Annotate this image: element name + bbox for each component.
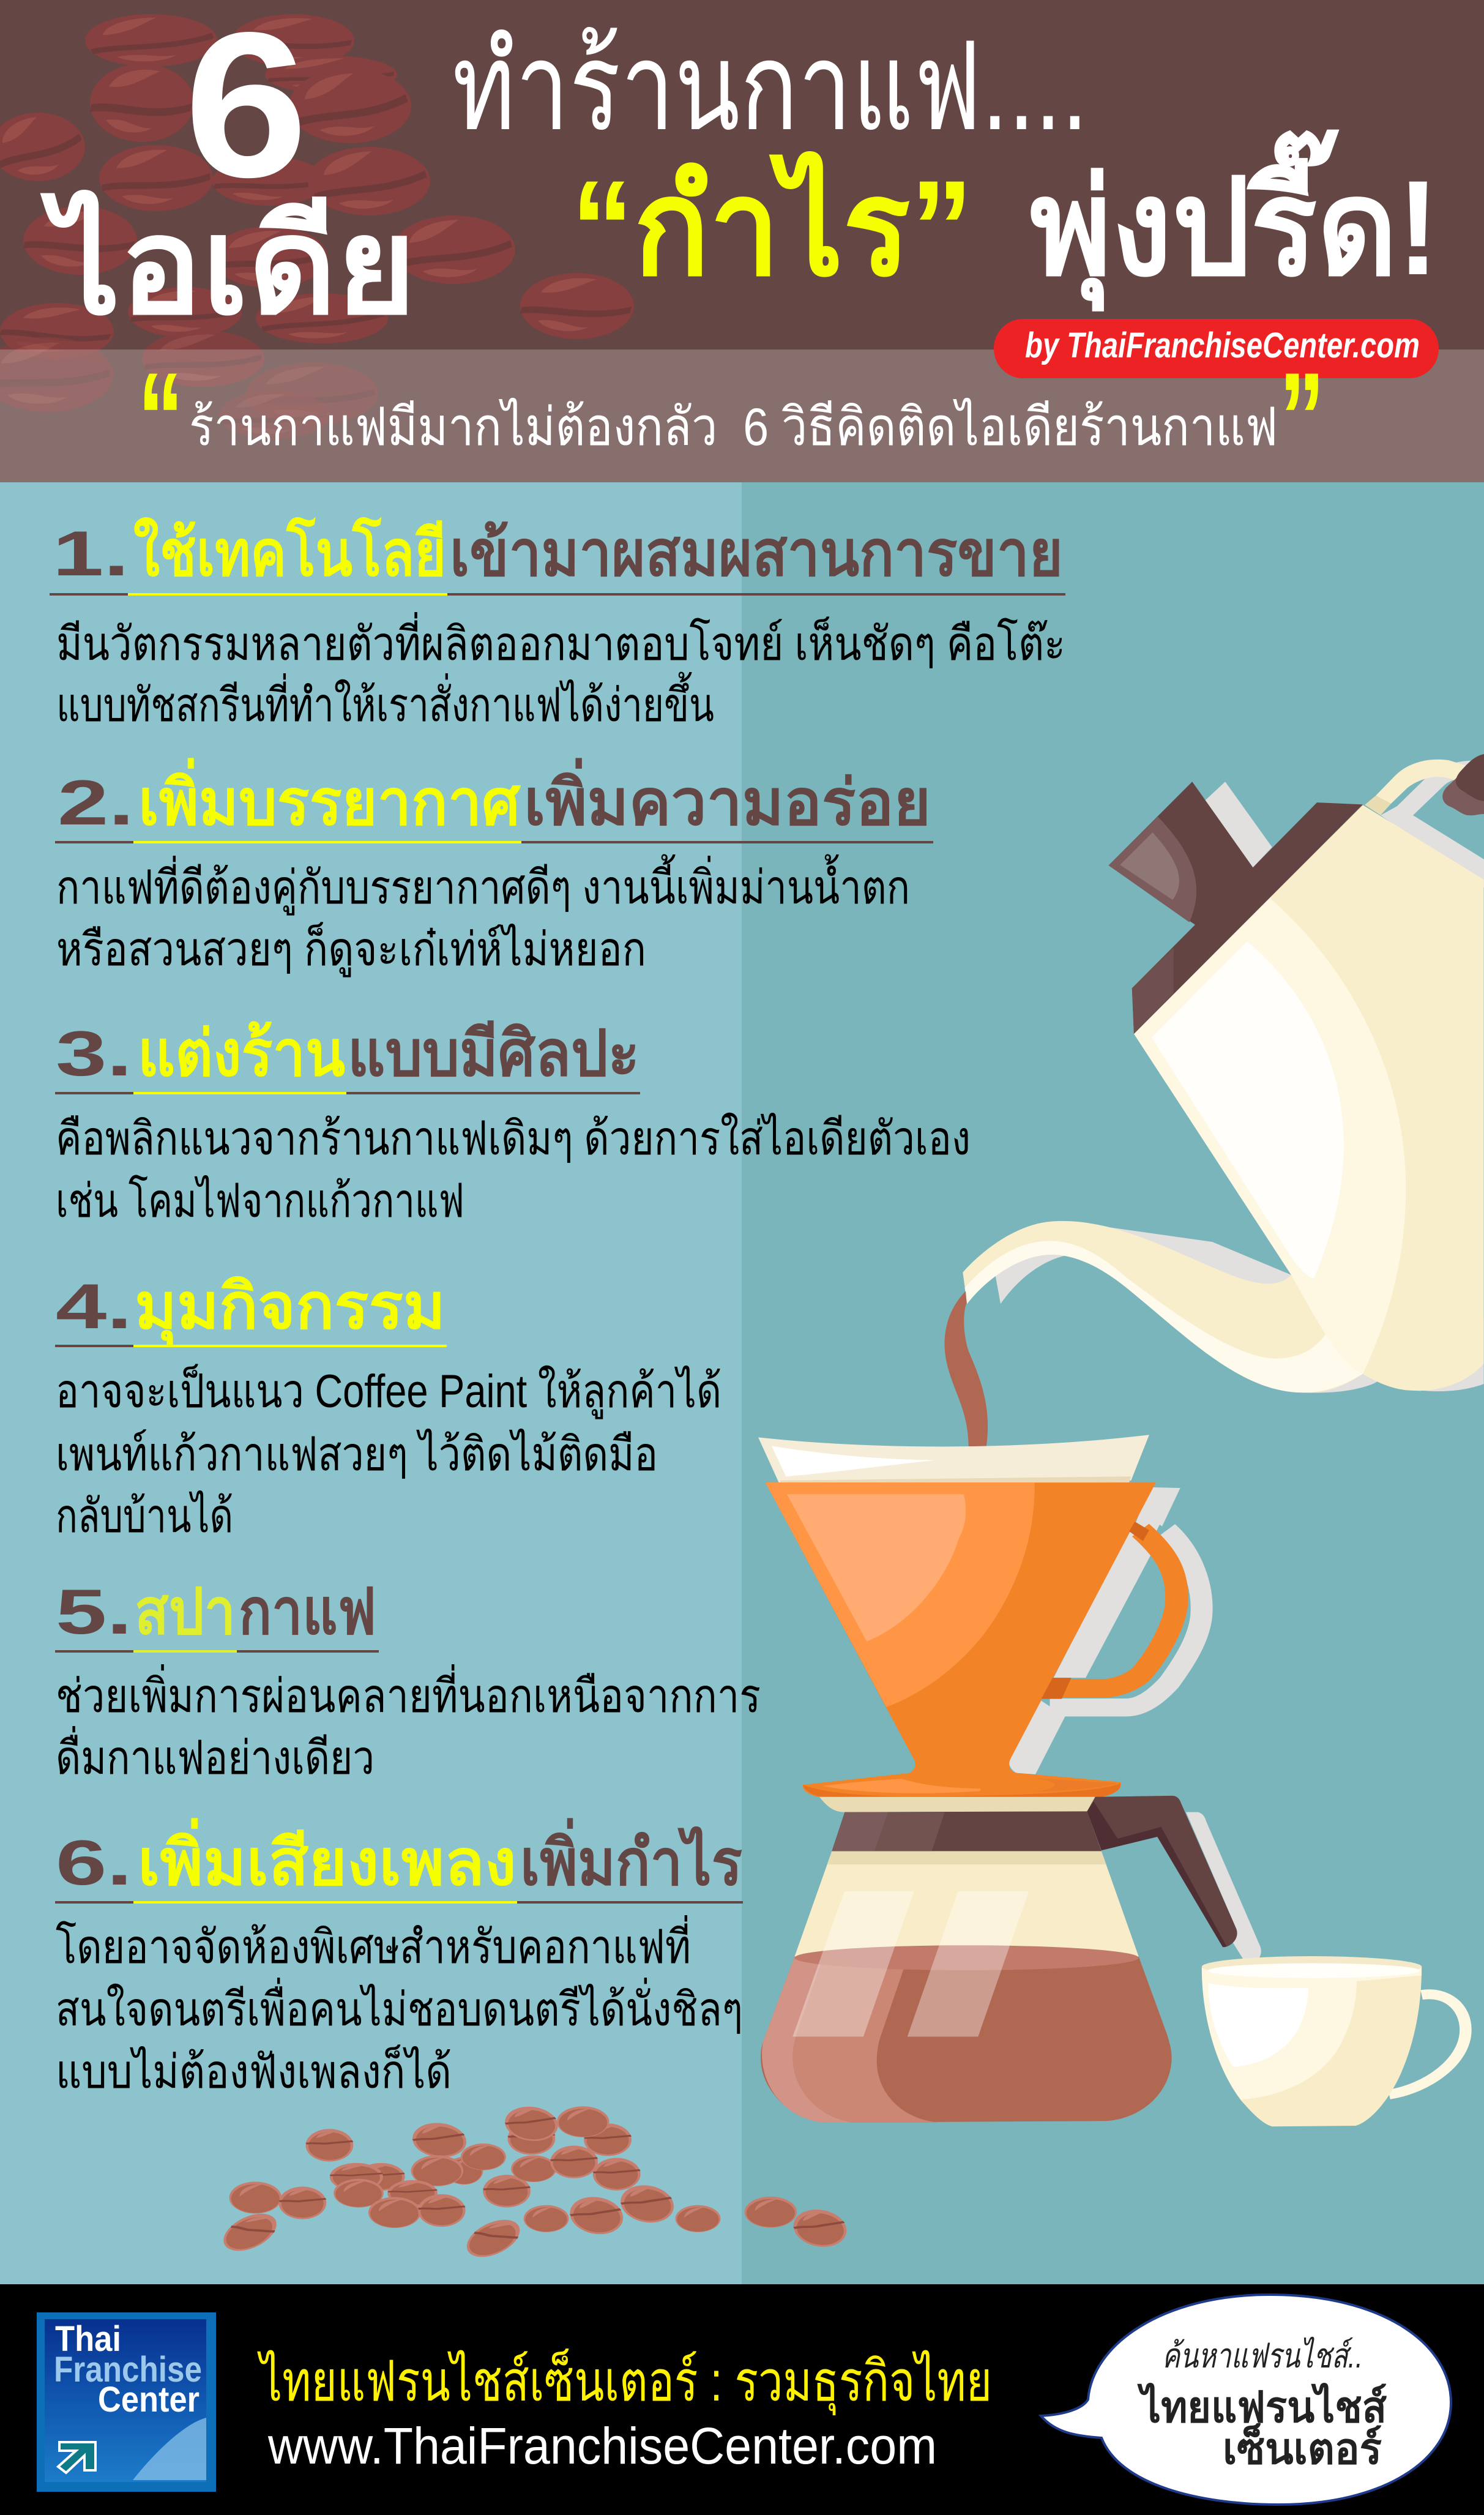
heading 3: แต่งร้าน: [138, 1018, 345, 1089]
section 2: [55, 758, 933, 977]
paper filter: [758, 1435, 1149, 1484]
heading 2: เพิ่มบรรยากาศ: [138, 758, 521, 839]
body text 4: อาจจะเป็นแนว Coffee Paint ให้ลูกค้าได้: [56, 1364, 721, 1419]
speech bubble: ไทยแฟรนไชส์: [1136, 2382, 1387, 2431]
heading 4: 4.: [56, 1271, 132, 1342]
body text 3: [56, 1112, 971, 1227]
subtitle quote: “: [138, 346, 184, 490]
orange cone: [766, 1482, 1156, 1801]
illustration: scattered coffee beans: [213, 2105, 852, 2260]
section 5: [55, 1577, 761, 1784]
heading 1: 1.: [53, 518, 129, 589]
heading 5: 5.: [56, 1577, 132, 1648]
logo: Thai Franchise Center: Franchise: [54, 2350, 202, 2390]
panel: header: [0, 0, 1484, 490]
body text 1: [56, 612, 1065, 731]
body text 1: มีนวัตกรรมหลายตัวที่ผลิตออกมาตอบโจทย์ เห็นชัดๆ คือโต๊ะ: [56, 612, 1065, 670]
heading 5: สปา: [135, 1577, 236, 1648]
title: ทำร้านกาแฟ....: ทำร้านกาแฟ....: [452, 19, 1088, 155]
body text 4: [56, 1364, 721, 1542]
heading 3: แบบมีศิลปะ: [348, 1018, 639, 1089]
badge: by ThaiFranchiseCenter.com: [994, 319, 1439, 378]
body text 1: แบบทัชสกรีนที่ทำให้เราสั่งกาแฟได้ง่ายขึ้น: [56, 671, 714, 731]
coffee cup: [1202, 1956, 1466, 2126]
body text 2: กาแฟที่ดีต้องคู่กับบรรยากาศดีๆ งานนี้เพิ่มม่านน้ำตก: [56, 854, 910, 916]
title: ไอเดีย: ไอเดีย: [40, 190, 416, 342]
subtitle quote: [138, 346, 1325, 490]
logo: Thai Franchise Center: Thai: [55, 2319, 121, 2359]
carafe glass: [761, 1796, 1261, 2123]
heading 3: 3.: [56, 1018, 132, 1089]
speech bubble: เซ็นเตอร์: [1223, 2423, 1382, 2473]
heading 6: 6.: [56, 1828, 132, 1899]
speech bubble: ค้นหาแฟรนไชส์..: [1162, 2336, 1363, 2375]
heading 4: มุมกิจกรรม: [135, 1271, 446, 1346]
body text 3: เช่น โคมไฟจากแก้วกาแฟ: [56, 1175, 464, 1227]
subtitle band: [0, 349, 1484, 482]
icon: arrow: [58, 2442, 95, 2473]
section 1: [50, 517, 1065, 731]
illustration: kettle: [944, 754, 1484, 1448]
section 3: [55, 1018, 971, 1227]
body text 4: เพนท์แก้วกาแฟสวยๆ ไว้ติดไม้ติดมือ: [56, 1428, 658, 1481]
body text 6: [56, 1915, 743, 2098]
heading 1: ใช้เทคโนโลยี: [133, 517, 446, 589]
body text 3: คือพลิกแนวจากร้านกาแฟเดิมๆ ด้วยการใส่ไอเดียตัวเอง: [56, 1112, 971, 1165]
section 4: [55, 1271, 721, 1542]
title: กำไร: “กำไร”: [571, 151, 973, 303]
body text 2: หรือสวนสวยๆ ก็ดูจะเก๋เท่ห์ไม่หยอก: [56, 922, 646, 977]
background panel: teal body: [0, 477, 1484, 2289]
heading 5: กาแฟ: [239, 1577, 376, 1648]
heading 2: [55, 758, 933, 843]
section 6: [55, 1818, 743, 2098]
coffee stream: [944, 1291, 988, 1448]
heading 2: เพิ่มความอร่อย: [524, 758, 931, 839]
body text 5: ดื่มกาแฟอย่างเดียว: [56, 1726, 375, 1784]
body text 6: แบบไม่ต้องฟังเพลงก็ได้: [56, 2044, 452, 2098]
speech bubble: [1041, 2295, 1451, 2505]
subtitle quote: ”: [1279, 346, 1325, 490]
logo: Thai Franchise Center: [37, 2312, 216, 2492]
heading 2: 2.: [58, 768, 134, 839]
body text 5: [56, 1664, 761, 1784]
logo: Thai Franchise Center: Center: [98, 2380, 199, 2420]
illustration: carafe and dripper: [758, 1435, 1466, 2126]
cone shadow and handle: [1009, 1487, 1202, 1774]
body text 4: กลับบ้านได้: [56, 1490, 233, 1542]
body text 6: โดยอาจจัดห้องพิเศษสำหรับคอกาแฟที่: [56, 1915, 691, 1973]
heading 1: [50, 517, 1065, 596]
heading 6: [55, 1818, 743, 1904]
heading 5: [55, 1577, 379, 1653]
body text 6: สนใจดนตรีเพื่อคนไม่ชอบดนตรีได้นั่งชิลๆ: [56, 1978, 743, 2036]
footer website text: www.ThaiFranchiseCenter.com: [267, 2417, 937, 2475]
body text 5: ช่วยเพิ่มการผ่อนคลายที่นอกเหนือจากการ: [56, 1664, 761, 1722]
subtitle quote: ร้านกาแฟมีมากไม่ต้องกลัว 6 วิธีคิดติดไอเดียร้านกาแฟ: [189, 398, 1278, 457]
heading 3: [55, 1018, 640, 1094]
panel: footer: [0, 2284, 1484, 2515]
body text 2: [56, 854, 910, 977]
title: พุ่งปรี๊ด!: พุ่งปรี๊ด!: [1030, 129, 1439, 312]
header coffee beans background: [0, 10, 643, 439]
heading 6: เพิ่มเสียงเพลง: [138, 1818, 516, 1899]
footer yellow text: ไทยแฟรนไชส์เซ็นเตอร์ : รวมธุรกิจไทย: [257, 2348, 992, 2416]
heading 1: เข้ามาผสมผสานการขาย: [450, 518, 1063, 589]
heading 6: เพิ่มกำไร: [520, 1818, 742, 1899]
